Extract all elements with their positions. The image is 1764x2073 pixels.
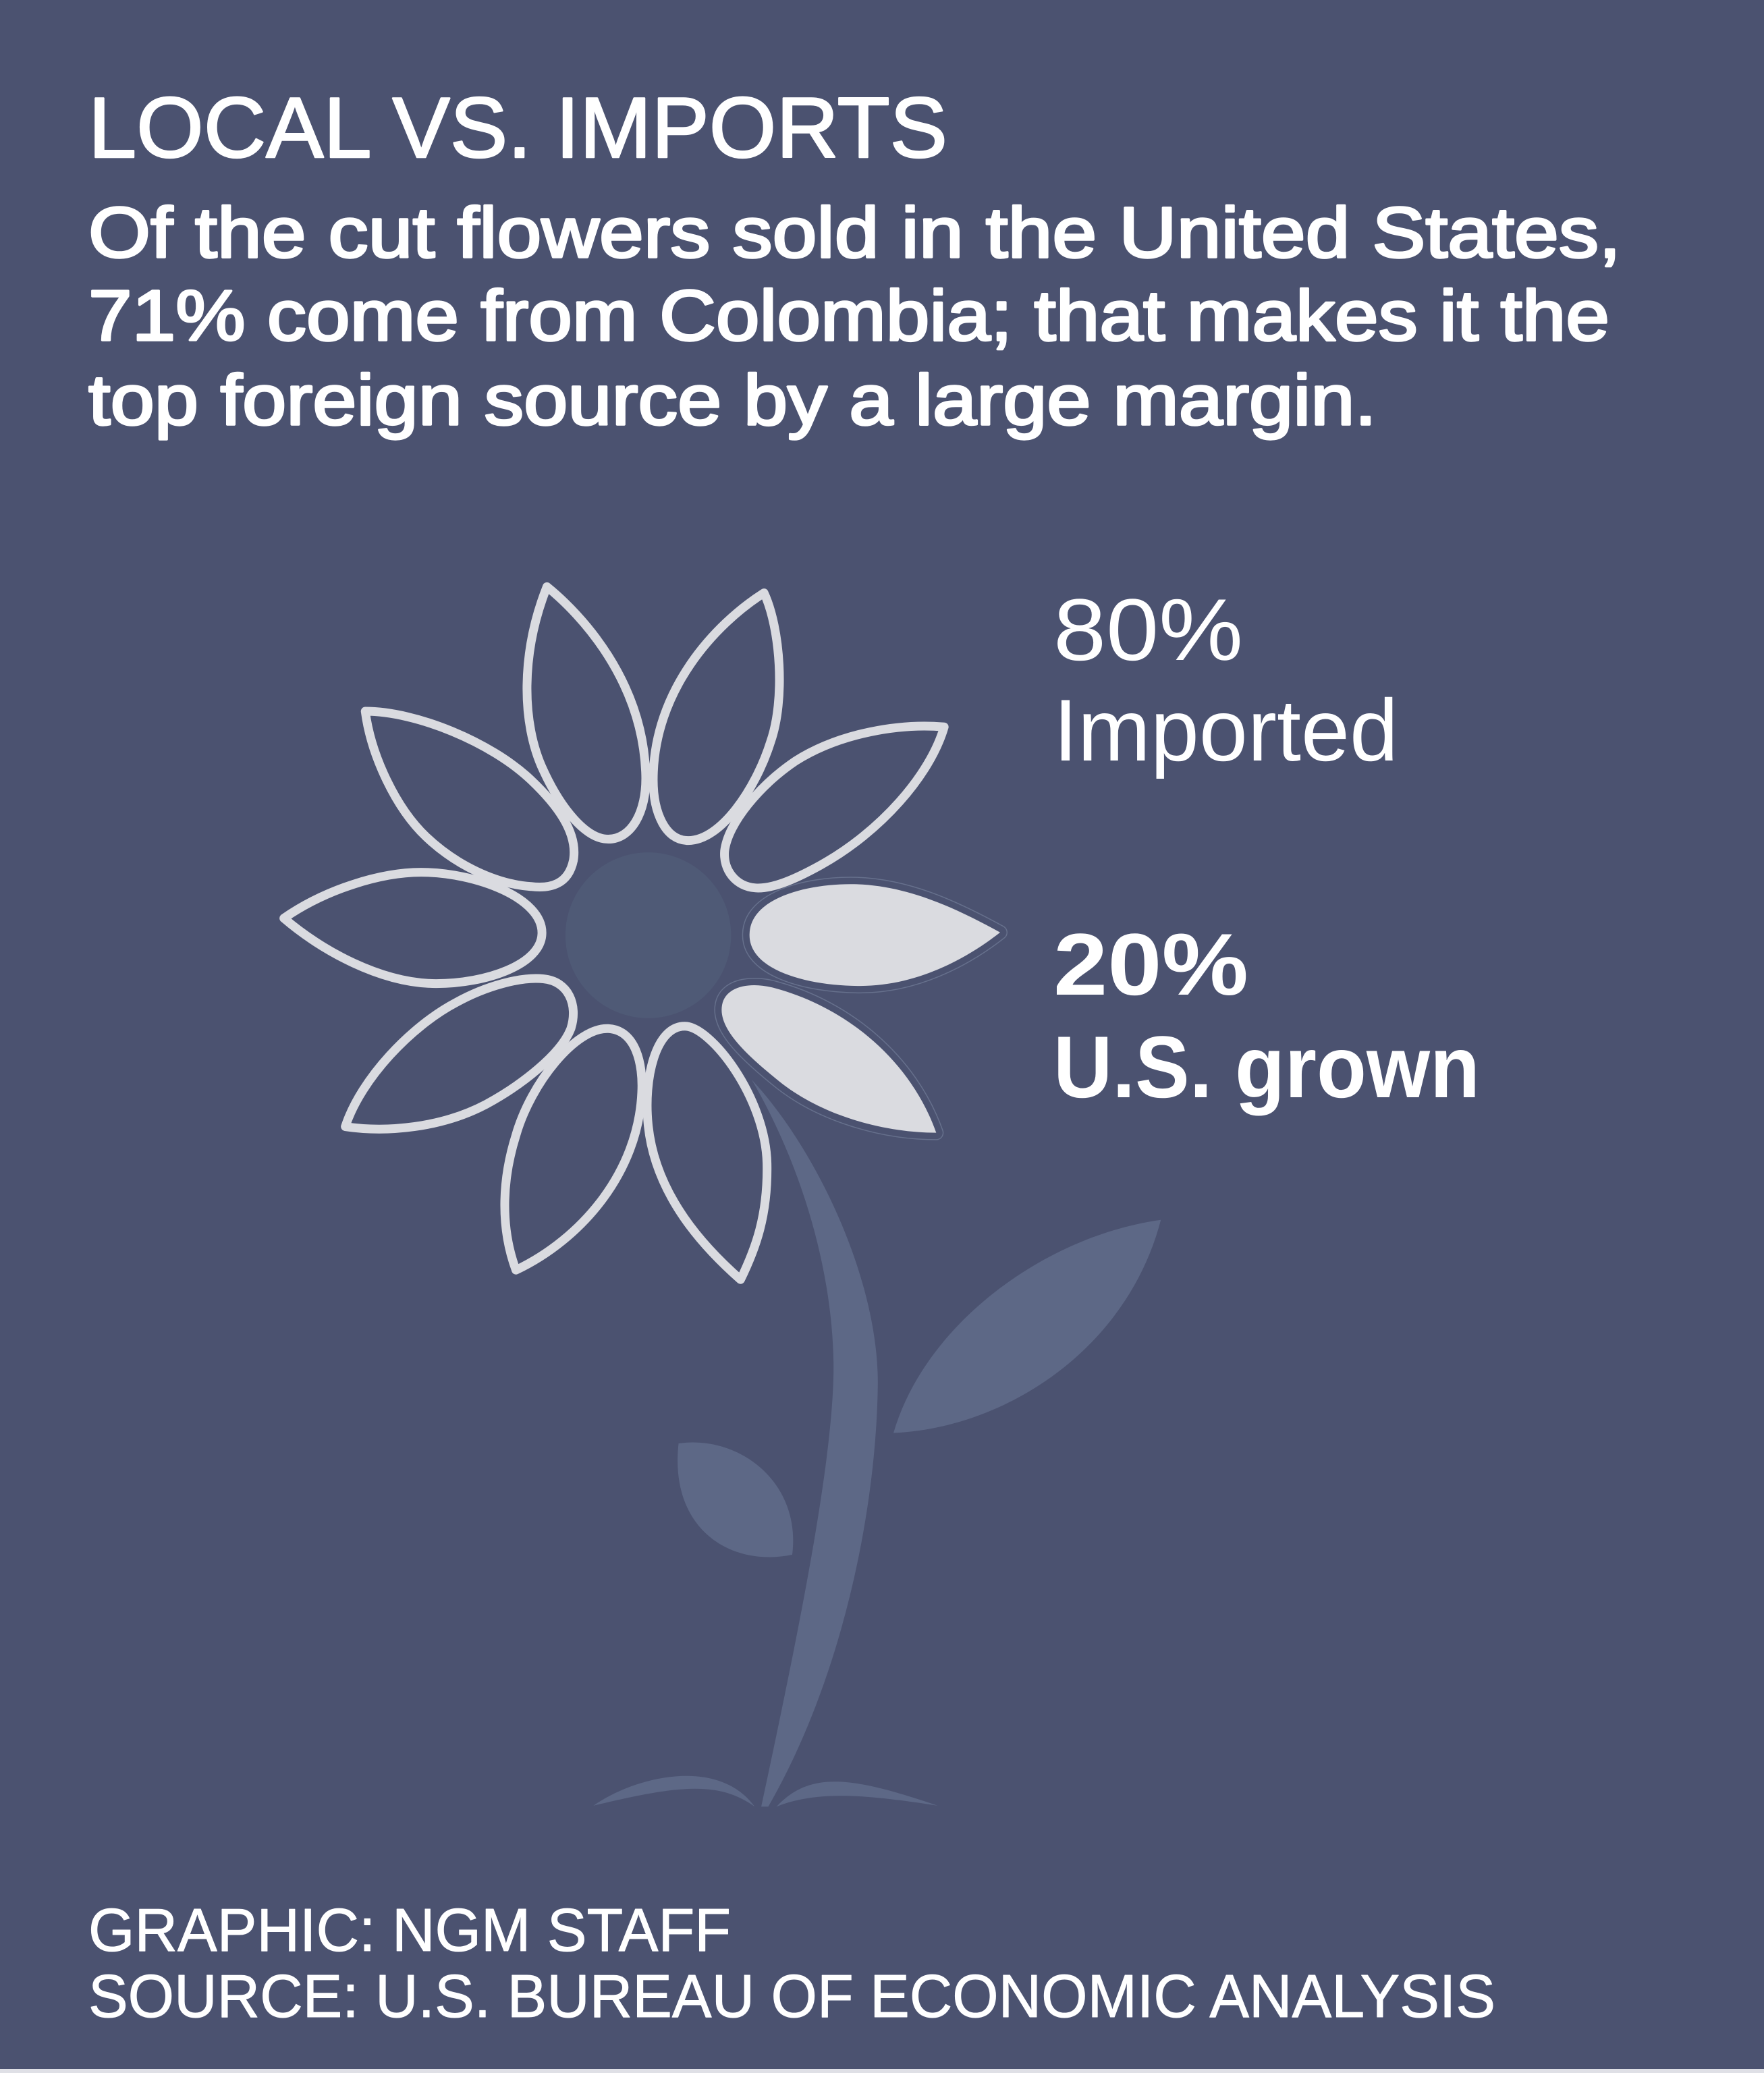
subtitle text block: Of the cut flowers sold in the United States, <box>88 193 1621 273</box>
flower head <box>284 586 1000 1279</box>
subtitle text block: top foreign source by a large margin. <box>88 360 1377 440</box>
label: 20% U.S. grown <box>1053 915 1480 1116</box>
stem <box>752 1080 878 1806</box>
outlined petals: 80% imported <box>284 586 944 1279</box>
label: 80% imported: Imported <box>1053 681 1398 779</box>
large leaf <box>893 1220 1161 1433</box>
flower stem and leaves <box>593 1080 1161 1806</box>
credits: GRAPHIC: NGM STAFF <box>88 1897 731 1964</box>
credits <box>88 1897 1495 2030</box>
right root <box>777 1781 938 1806</box>
left root <box>593 1776 754 1806</box>
title: LOCAL VS. IMPORTS <box>88 80 947 175</box>
label: 80% imported <box>1053 580 1398 779</box>
small leaf <box>678 1443 793 1557</box>
subtitle text block: 71% come from Colombia; that makes it the <box>88 276 1609 356</box>
label: 20% U.S. grown: U.S. grown <box>1053 1018 1480 1116</box>
label: 20% U.S. grown: 20% <box>1053 915 1248 1014</box>
credits: SOURCE: U.S. BUREAU OF ECONOMIC ANALYSIS <box>88 1963 1495 2030</box>
flower centre <box>566 852 731 1018</box>
filled petals: 20% U.S. grown <box>721 884 1000 1133</box>
label: 80% imported: 80% <box>1053 580 1243 679</box>
subtitle text block <box>88 193 1621 440</box>
